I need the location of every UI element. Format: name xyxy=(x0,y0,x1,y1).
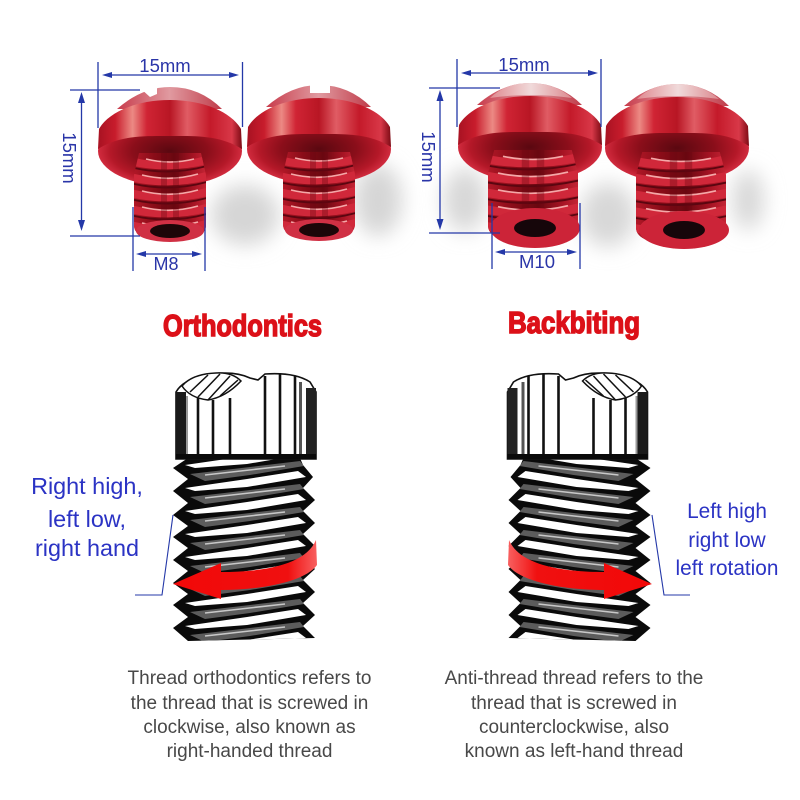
text: anti-thread description: counterclockwise, also xyxy=(479,717,669,738)
text: orthodontic thread description: clockwise, also known as xyxy=(143,717,356,738)
screw head xyxy=(508,373,648,459)
bolt: M10 left xyxy=(458,83,602,248)
callout: left high, right low: Left high xyxy=(687,500,767,523)
text: anti-thread description: known as left-hand thread xyxy=(465,741,683,762)
bolt: M8 right xyxy=(247,84,391,242)
leader line xyxy=(652,515,690,595)
dimension: M8 height 15mm xyxy=(59,90,140,236)
dimension: M10 width 15mm xyxy=(457,54,601,127)
dimension: M10 thread: M10 xyxy=(519,251,555,272)
screw threads xyxy=(508,448,650,665)
diagram: right-hand thread screw xyxy=(135,373,317,665)
arrow: rotation right xyxy=(508,540,652,599)
dimension: M8 thread xyxy=(133,207,205,274)
leader line xyxy=(135,515,173,595)
text: anti-thread description: Anti-thread thread refers to the xyxy=(445,668,703,689)
text: anti-thread description: thread that is screwed in xyxy=(471,693,677,714)
panel: M10 bolts photo xyxy=(418,54,764,272)
shadow: M8 bolts xyxy=(211,164,402,245)
dimension: M8 width 15mm xyxy=(98,55,242,128)
bolt: M8 left xyxy=(98,84,242,243)
arrow: rotation left xyxy=(173,540,317,599)
diagram: left-hand thread screw xyxy=(508,373,690,665)
dimension: M8 width 15mm: 15mm xyxy=(139,55,191,76)
dimension: M10 width 15mm: 15mm xyxy=(498,54,550,75)
heading: Backbiting: Backbiting xyxy=(508,305,640,340)
text: orthodontic thread description: right-handed thread xyxy=(167,741,332,762)
panel: M8 bolts photo xyxy=(59,55,402,274)
screw head xyxy=(176,373,316,459)
screw threads xyxy=(173,448,315,665)
bolt: M10 right xyxy=(605,84,749,249)
text: orthodontic thread description: Thread orthodontics refers to xyxy=(128,668,371,689)
callout: right high, left low: Right high, xyxy=(31,473,143,499)
callout: right high, left low: right hand xyxy=(35,535,139,561)
dimension: M8 height 15mm: 15mm xyxy=(59,132,80,184)
dimension: M10 height 15mm xyxy=(418,88,500,233)
callout: left high, right low: left rotation xyxy=(676,557,778,580)
callout: left high, right low: right low xyxy=(688,529,767,552)
dimension: M8 thread: M8 xyxy=(153,254,179,274)
heading: Orthodontics: Orthodontics xyxy=(163,308,322,343)
dimension: M10 height 15mm: 15mm xyxy=(418,131,439,183)
dimension: M10 thread xyxy=(492,203,580,272)
callout: right high, left low: left low, xyxy=(48,506,126,532)
shadow: M10 bolts xyxy=(443,168,764,247)
text: orthodontic thread description: the thread that is screwed in xyxy=(131,693,368,714)
